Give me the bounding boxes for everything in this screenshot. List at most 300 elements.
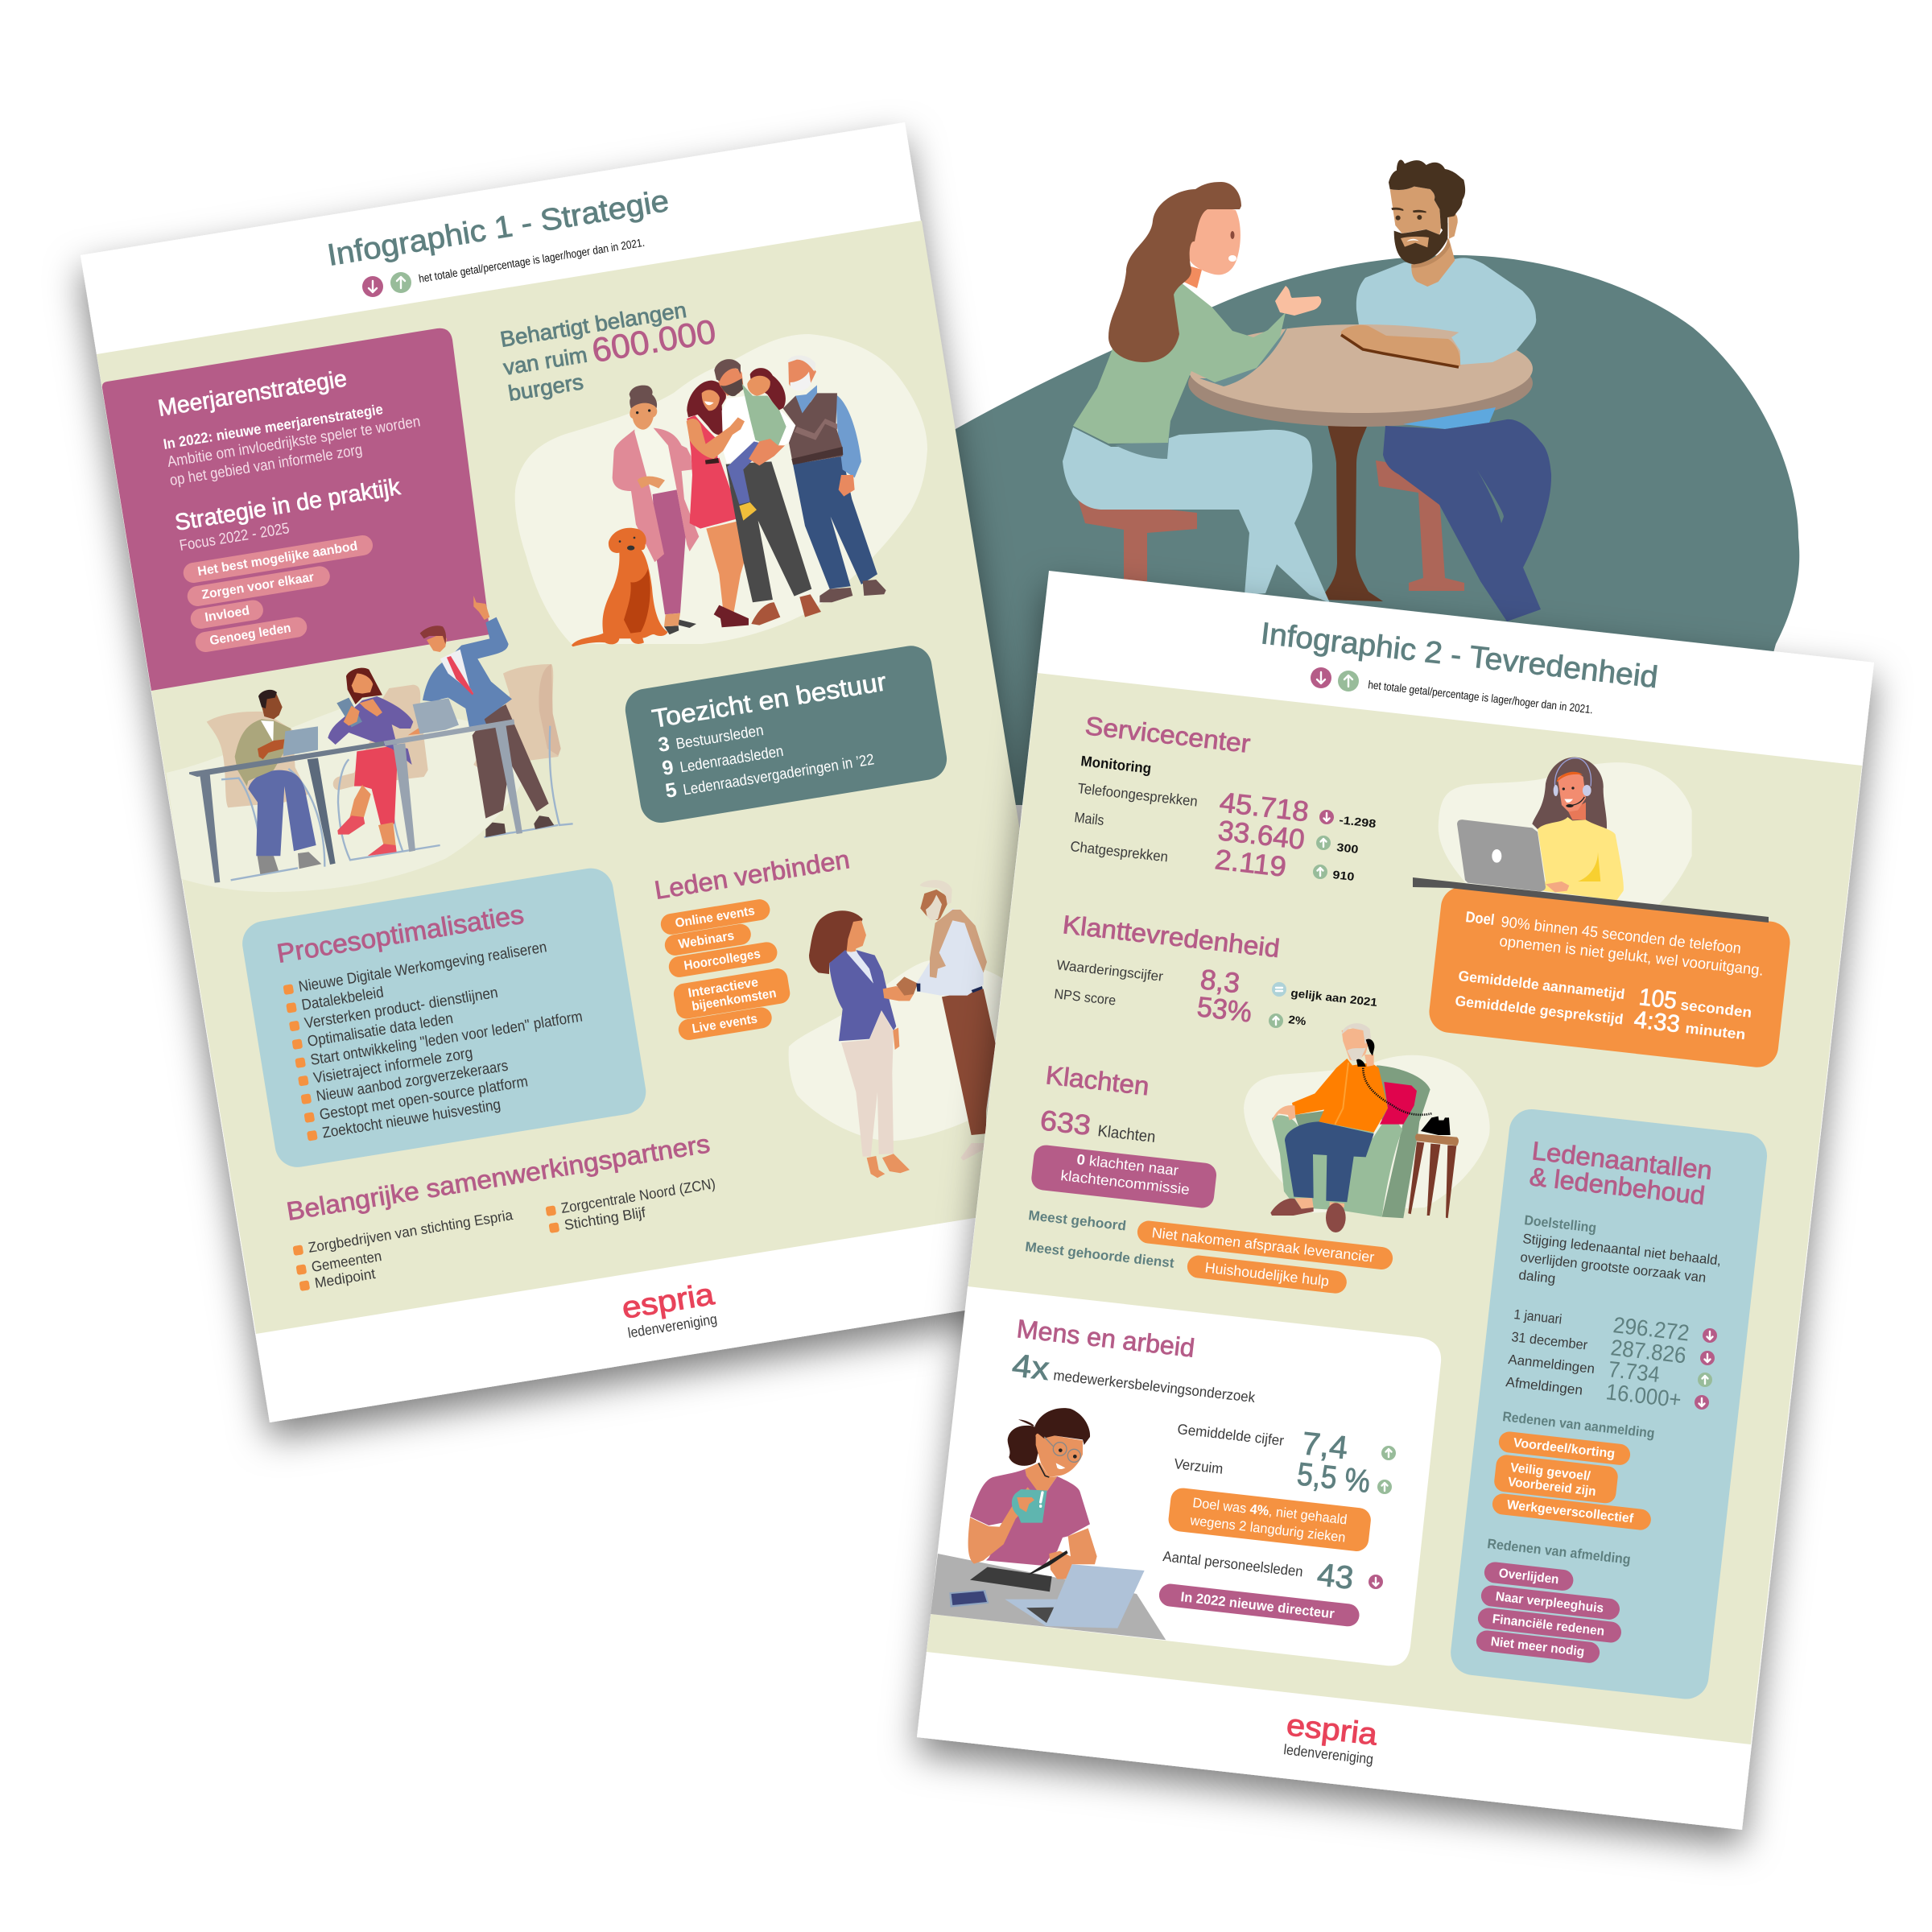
head	[1342, 1026, 1370, 1061]
pill: Overlijden	[1498, 1567, 1559, 1587]
fringe	[1557, 772, 1583, 782]
right arm	[1049, 1528, 1097, 1579]
laptop	[1457, 819, 1546, 891]
headset	[1554, 758, 1591, 807]
icon: down arrow	[1319, 810, 1334, 824]
woman's hand	[1275, 286, 1321, 316]
labels: Telefoongesprekken	[1077, 780, 1199, 810]
list: Bestuursleden	[675, 722, 765, 753]
page 2: Infographic 2 - Tevredenheid	[927, 617, 1862, 1767]
hand on armrest	[1272, 1105, 1295, 1121]
callout: wegens 2 langdurig zieken	[1189, 1513, 1346, 1546]
logo: espria: ledenvereniging	[626, 1311, 718, 1341]
delta: 2%	[1288, 1013, 1307, 1028]
list: 5	[663, 778, 679, 803]
teeth	[1406, 239, 1419, 242]
glasses	[1044, 1437, 1080, 1462]
gap in man's legs	[1475, 466, 1504, 523]
list	[656, 717, 876, 803]
text block: overlijden grootste oorzaak van	[1520, 1249, 1707, 1286]
woman	[809, 910, 914, 1178]
telephone	[1421, 1117, 1451, 1135]
man in white shirt	[714, 359, 821, 625]
page 1 shadow	[80, 122, 1094, 1422]
stats: Gemiddelde gesprekstijd	[1455, 993, 1624, 1027]
slippers	[1270, 1199, 1346, 1232]
goal text: opnemen is niet gelukt, wel vooruitgang.	[1498, 933, 1765, 980]
heading: Strategie in de praktijk	[173, 474, 402, 536]
man's sleeve	[1451, 291, 1536, 365]
stats: 5,5 %	[1295, 1456, 1372, 1500]
heading: Behartigt belangen: van ruim	[502, 343, 589, 380]
laptop right	[413, 698, 459, 734]
icon: down arrow	[1368, 1575, 1383, 1589]
bullet list: Zoektocht nieuwe huisvesting	[321, 1096, 502, 1142]
panel: Ledenaantallen & ledenbehoud	[1448, 1107, 1769, 1701]
callout	[1030, 1144, 1218, 1209]
delta: 300	[1336, 840, 1360, 856]
shirt	[970, 1469, 1090, 1566]
stats: 4:33	[1633, 1006, 1682, 1038]
section: Klachten	[1030, 1060, 1218, 1209]
child in green sweater	[727, 368, 786, 521]
bullet list	[283, 939, 584, 1145]
panel: Doel	[1427, 885, 1792, 1069]
text block	[1518, 1231, 1722, 1286]
heading: Klanttevredenheid	[1061, 910, 1282, 963]
beard	[1394, 223, 1447, 264]
subheading: Redenen van afmelding	[1487, 1536, 1632, 1567]
bullet list: Versterken product- dienstlijnen	[303, 985, 499, 1032]
pill	[186, 565, 332, 608]
stats table: 7.734	[1607, 1356, 1661, 1387]
heading: Behartigt belangen: burgers	[506, 369, 585, 406]
pill: Naar verpleeghuis	[1495, 1590, 1604, 1616]
illustration: woman with mug at desk	[931, 1408, 1166, 1640]
label: Meest gehoorde dienst	[1025, 1239, 1175, 1271]
sweater shade	[1578, 852, 1600, 881]
heading: Leden verbinden	[652, 844, 852, 905]
pen	[1028, 1550, 1068, 1575]
cream blob	[1439, 762, 1692, 907]
pill: Het best mogelijke aanbod	[196, 539, 358, 579]
panel background	[1427, 885, 1792, 1069]
hair	[1342, 1023, 1371, 1044]
woman in red dress	[687, 381, 750, 627]
stats table: 31 december	[1511, 1329, 1588, 1353]
bullet list: Optimalisatie data leden	[306, 1010, 454, 1051]
face	[1035, 1434, 1083, 1477]
face	[1558, 773, 1586, 811]
icon: down arrow	[362, 276, 383, 297]
hair	[1389, 159, 1465, 236]
icon: down arrow	[1700, 1351, 1715, 1365]
desk	[931, 1554, 1166, 1640]
illustration: handshake	[789, 880, 1004, 1178]
stats	[1455, 968, 1752, 1042]
pill	[182, 534, 374, 584]
delta: gelijk aan 2021	[1290, 986, 1378, 1009]
hair	[1532, 758, 1607, 829]
heading: Klachten	[1044, 1060, 1150, 1100]
stats: Gemiddelde cijfer	[1177, 1421, 1285, 1449]
pill: Voordeel/korting	[1513, 1436, 1616, 1461]
woman's hair	[1108, 182, 1241, 362]
cushion	[1380, 1082, 1417, 1125]
labels	[1070, 780, 1199, 865]
pill	[189, 599, 265, 630]
pill	[1480, 1584, 1620, 1620]
panel: Toezicht en bestuur	[622, 642, 950, 826]
icon: up arrow	[1313, 865, 1327, 879]
text block: daling	[1518, 1267, 1556, 1286]
numbers	[1213, 786, 1311, 883]
stats table: 16.000+	[1604, 1379, 1682, 1412]
heading: Mens en arbeid	[1015, 1314, 1196, 1363]
icon: down arrow	[1703, 1328, 1717, 1343]
page 1 olive background	[97, 221, 1080, 1334]
pill	[659, 898, 771, 936]
beard	[1347, 1048, 1366, 1061]
panel: Procesoptimalisaties	[239, 865, 649, 1170]
pill: Niet nakomen afspraak leverancier	[1151, 1224, 1375, 1265]
numbers: 8,3	[1199, 964, 1241, 999]
heading: Belangrijke samenwerkingspartners	[284, 1129, 712, 1226]
neck	[1025, 1463, 1057, 1496]
logo: espria: ledenvereniging	[1283, 1741, 1374, 1767]
man's stool	[1376, 460, 1464, 591]
pill: Online events	[674, 904, 756, 931]
panel background	[1448, 1107, 1769, 1701]
pill: two lines: Voorbereid zijn	[1507, 1476, 1596, 1499]
woman's arm on man's chest	[687, 417, 745, 459]
older woman	[613, 386, 704, 634]
stats: minuten	[1685, 1020, 1746, 1042]
heading: Behartigt belangen: 600.000	[589, 312, 718, 369]
eyes and mouth	[1563, 786, 1575, 803]
list: 9	[660, 756, 675, 780]
stats table: 287.826	[1609, 1335, 1687, 1368]
pill: Werkgeverscollectief	[1506, 1498, 1634, 1526]
table leg	[1320, 423, 1383, 601]
neck	[1568, 803, 1586, 819]
teal background blob	[886, 255, 1799, 805]
text block: Stijging ledenaantal niet behaald,	[1522, 1231, 1722, 1269]
mug	[1012, 1489, 1047, 1523]
icon: down arrow	[1311, 667, 1331, 688]
face	[1390, 187, 1441, 235]
section: Belangrijke samenwerkingspartners	[284, 1129, 716, 1294]
pill	[1186, 1254, 1348, 1294]
side table	[1408, 1133, 1459, 1218]
section: Klanttevredenheid	[1054, 910, 1378, 1029]
stats table	[1505, 1307, 1690, 1412]
numbers: 53%	[1195, 991, 1253, 1029]
text block: op het gebied van informele zorg	[168, 442, 364, 489]
heading: Servicecenter	[1084, 711, 1252, 758]
callout	[1167, 1487, 1372, 1553]
illustration: old man on the phone	[1244, 1023, 1490, 1232]
list: 3	[656, 733, 671, 757]
left arm	[968, 1487, 1036, 1564]
icon: up arrow	[1698, 1373, 1712, 1387]
panel background	[622, 642, 950, 826]
man's arm	[1341, 325, 1460, 366]
hair bun	[1008, 1419, 1041, 1466]
subheading: Doelstelling	[1524, 1212, 1597, 1236]
delta: 910	[1332, 868, 1356, 883]
hand	[1546, 881, 1569, 892]
heading: Ledenaantallen	[1530, 1136, 1714, 1185]
table side	[1188, 340, 1533, 427]
stats table: Afmeldingen	[1505, 1374, 1583, 1398]
page 2 olive background	[927, 673, 1862, 1744]
labels: Mails	[1074, 809, 1105, 828]
bullet list: Nieuwe Digitale Werkomgeving realiseren	[297, 939, 548, 996]
pill	[1136, 1220, 1394, 1270]
section: Leden verbinden	[652, 844, 852, 1042]
table top	[1188, 324, 1533, 413]
pill: two lines: Veilig gevoel/	[1509, 1461, 1591, 1484]
pill: Zorgen voor elkaar	[200, 571, 315, 602]
subheading: Redenen van aanmelding	[1502, 1409, 1655, 1441]
numbers: 2.119	[1213, 844, 1288, 883]
panel background	[931, 1286, 1441, 1666]
pill	[1492, 1492, 1652, 1531]
text block: In 2022: nieuwe meerjarenstrategie	[162, 401, 384, 452]
armchair back	[1377, 1065, 1430, 1218]
heading: Meerjarenstrategie	[156, 365, 349, 422]
jacket	[1292, 1059, 1388, 1133]
number: 4x	[1010, 1348, 1051, 1387]
woman's sweater shadow	[1115, 326, 1288, 459]
panel background	[239, 865, 649, 1170]
woman's mouth	[1228, 255, 1236, 262]
illustration: office meeting	[167, 596, 573, 892]
eyes and mouth	[1038, 1448, 1077, 1477]
chairs	[207, 664, 561, 807]
bullet list: Nieuw aanbod zorgverzekeraars	[315, 1058, 510, 1105]
pill	[1498, 1430, 1631, 1466]
text block: Ambitie om invloedrijkste speler te worden	[166, 413, 422, 471]
title: Infographic 1 - Strategie	[325, 184, 671, 273]
phone cord	[1363, 1068, 1431, 1115]
legend	[1311, 667, 1594, 716]
zipper	[1335, 1063, 1348, 1125]
older man with vest	[783, 355, 886, 602]
cream blob	[789, 960, 1004, 1141]
list: Medipoint	[313, 1265, 377, 1291]
page 2 shadow	[917, 571, 1874, 1830]
phone	[949, 1590, 989, 1608]
pill: two lines	[1493, 1454, 1619, 1505]
panel: Meerjarenstrategie	[102, 328, 490, 691]
heading: Procesoptimalisaties	[275, 899, 526, 968]
pill	[1158, 1583, 1360, 1628]
illustration: couple at table	[1063, 159, 1551, 621]
hair top	[1034, 1408, 1090, 1445]
woman's sweater	[1073, 279, 1286, 444]
goal text: Doel	[1464, 909, 1496, 929]
stats table: 296.272	[1612, 1312, 1690, 1346]
labels: Chatgesprekken	[1070, 838, 1169, 865]
section: Meest gehoord	[1025, 1208, 1394, 1294]
bullet list: Datalekbeleid	[300, 984, 385, 1014]
list	[292, 1175, 716, 1294]
laptop	[1005, 1564, 1145, 1629]
pill: Genoeg leden	[208, 621, 292, 648]
trousers	[1285, 1121, 1374, 1202]
pill: Niet meer nodig	[1490, 1635, 1585, 1659]
subheading: Focus 2022 - 2025	[178, 520, 291, 555]
legend text: het totale getal/percentage is lager/hoger dan in 2021.	[418, 236, 646, 285]
icon: up arrow	[1381, 1446, 1396, 1460]
legend	[362, 236, 646, 297]
man's blue undershirt	[1403, 407, 1496, 429]
neck	[1411, 239, 1455, 287]
tablet	[970, 1567, 1052, 1591]
pill	[194, 616, 308, 654]
list: Stichting Blijf	[563, 1204, 647, 1233]
eyes and brows	[1391, 208, 1426, 221]
woman's lower body	[1063, 427, 1330, 603]
labels: Waarderingscijfer	[1056, 957, 1164, 985]
pill: In 2022 nieuwe directeur	[1180, 1589, 1335, 1621]
illustration: family with dog	[572, 355, 886, 646]
pill	[663, 923, 753, 957]
dog	[572, 528, 667, 646]
text block	[162, 401, 422, 489]
chair frames	[221, 726, 573, 880]
desk	[189, 719, 522, 883]
labels	[1054, 957, 1164, 1009]
pill: Invloed	[204, 604, 250, 625]
panel: Mens en arbeid	[931, 1286, 1441, 1666]
stats: seconden	[1680, 997, 1752, 1021]
neck shadow	[1411, 239, 1451, 268]
pill	[1484, 1561, 1575, 1591]
icon: equal	[1272, 982, 1286, 997]
cream blob	[167, 700, 526, 892]
icon: up arrow	[1316, 836, 1331, 850]
cream blob	[1244, 1055, 1490, 1213]
page 1: Infographic 1 - Strategie	[97, 184, 1080, 1341]
woman's face	[1183, 208, 1241, 275]
heading	[1528, 1136, 1714, 1210]
icon: up arrow	[390, 272, 411, 293]
callout: Doel was 4%, niet gehaald	[1192, 1495, 1348, 1527]
pill: Hoorcolleges	[683, 947, 762, 973]
hand on phone	[1364, 1055, 1374, 1067]
woman's stool	[1078, 499, 1197, 581]
logo: espria: espria	[1285, 1708, 1380, 1752]
man's legs	[1383, 419, 1551, 621]
labels: NPS score	[1054, 986, 1117, 1009]
label: Klachten	[1096, 1122, 1156, 1146]
numbers: 33.640	[1216, 815, 1307, 856]
pill	[1476, 1629, 1600, 1664]
illustration: call-centre woman	[1439, 758, 1692, 907]
sweater	[1538, 817, 1624, 900]
pill: Webinars	[678, 929, 735, 952]
pill: Live events	[691, 1012, 758, 1036]
logo: espria: espria	[620, 1278, 717, 1326]
laptop left	[283, 726, 318, 756]
goal text: 90% binnen 45 seconden de telefoon	[1500, 914, 1742, 957]
stats: 7,4	[1300, 1426, 1350, 1466]
desk	[1413, 877, 1769, 923]
pill: Huishoudelijke hulp	[1204, 1260, 1330, 1290]
callout: klachtencommissie	[1060, 1167, 1191, 1198]
man's head	[1389, 159, 1465, 287]
logo: espria	[620, 1278, 718, 1341]
label: Aantal personeelsleden	[1162, 1548, 1304, 1579]
stats table: 1 januari	[1513, 1307, 1563, 1327]
subheading: Monitoring	[1080, 753, 1152, 777]
heading: Toezicht en bestuur	[650, 667, 889, 733]
cream blob behind family	[515, 334, 927, 644]
armchair front	[1272, 1115, 1402, 1217]
armchair inner	[1294, 1111, 1324, 1127]
label: Meest gehoord	[1028, 1208, 1127, 1234]
icon: up arrow	[1338, 671, 1359, 691]
list: Zorgcentrale Noord (ZCN)	[559, 1175, 716, 1216]
numbers	[1195, 964, 1253, 1029]
stats table: Aanmeldingen	[1508, 1352, 1596, 1377]
pill: two lines	[672, 967, 791, 1020]
person: woman in purple	[328, 668, 413, 856]
bullet list: Gestopt met open-source platform	[318, 1073, 529, 1124]
number: 43	[1315, 1557, 1356, 1596]
woman's neck	[1179, 266, 1202, 288]
pill: two lines: Interactieve	[687, 976, 759, 1001]
stats: 105	[1637, 984, 1678, 1014]
icon: down arrow	[1695, 1395, 1709, 1410]
number: 633	[1038, 1104, 1092, 1141]
list: Ledenraadsvergaderingen in ’22	[682, 751, 875, 799]
list: Zorgbedrijven van stichting Espria	[307, 1207, 514, 1256]
woman's eye	[1230, 231, 1235, 239]
pill	[667, 940, 778, 979]
pill	[1477, 1607, 1622, 1644]
goal text	[1464, 909, 1765, 980]
stats: Verzuim	[1174, 1455, 1224, 1477]
bullet list: Start ontwikkeling "leden voor leden" platform	[309, 1009, 584, 1069]
pill: Financiële redenen	[1492, 1612, 1605, 1639]
stats	[1174, 1421, 1372, 1500]
stats: Gemiddelde aannametijd	[1458, 968, 1625, 1002]
icon: up arrow	[1269, 1013, 1283, 1028]
callout: 0 klachten naar	[1076, 1151, 1179, 1179]
label: medewerkersbelevingsonderzoek	[1053, 1367, 1257, 1406]
ankles	[1294, 1198, 1344, 1209]
list: Gemeenten	[310, 1248, 383, 1275]
delta: -1.298	[1339, 813, 1377, 830]
man	[896, 880, 996, 1161]
icon: up arrow	[1377, 1480, 1392, 1494]
logo: espria	[1283, 1708, 1380, 1767]
heading: & ledenbehoud	[1528, 1162, 1707, 1210]
pill: two lines: bijeenkomsten	[691, 987, 778, 1013]
heading: Behartigt belangen: Behartigt belangen	[498, 298, 688, 352]
man's arm shadow line	[1341, 335, 1459, 367]
numbers: 45.718	[1218, 786, 1311, 828]
man's shirt	[1356, 258, 1536, 366]
legend text: het totale getal/percentage is lager/hoger dan in 2021.	[1368, 678, 1594, 716]
bullet list: Visietraject informele zorg	[312, 1045, 474, 1087]
handset	[1356, 1039, 1374, 1067]
mouth	[1401, 237, 1429, 247]
